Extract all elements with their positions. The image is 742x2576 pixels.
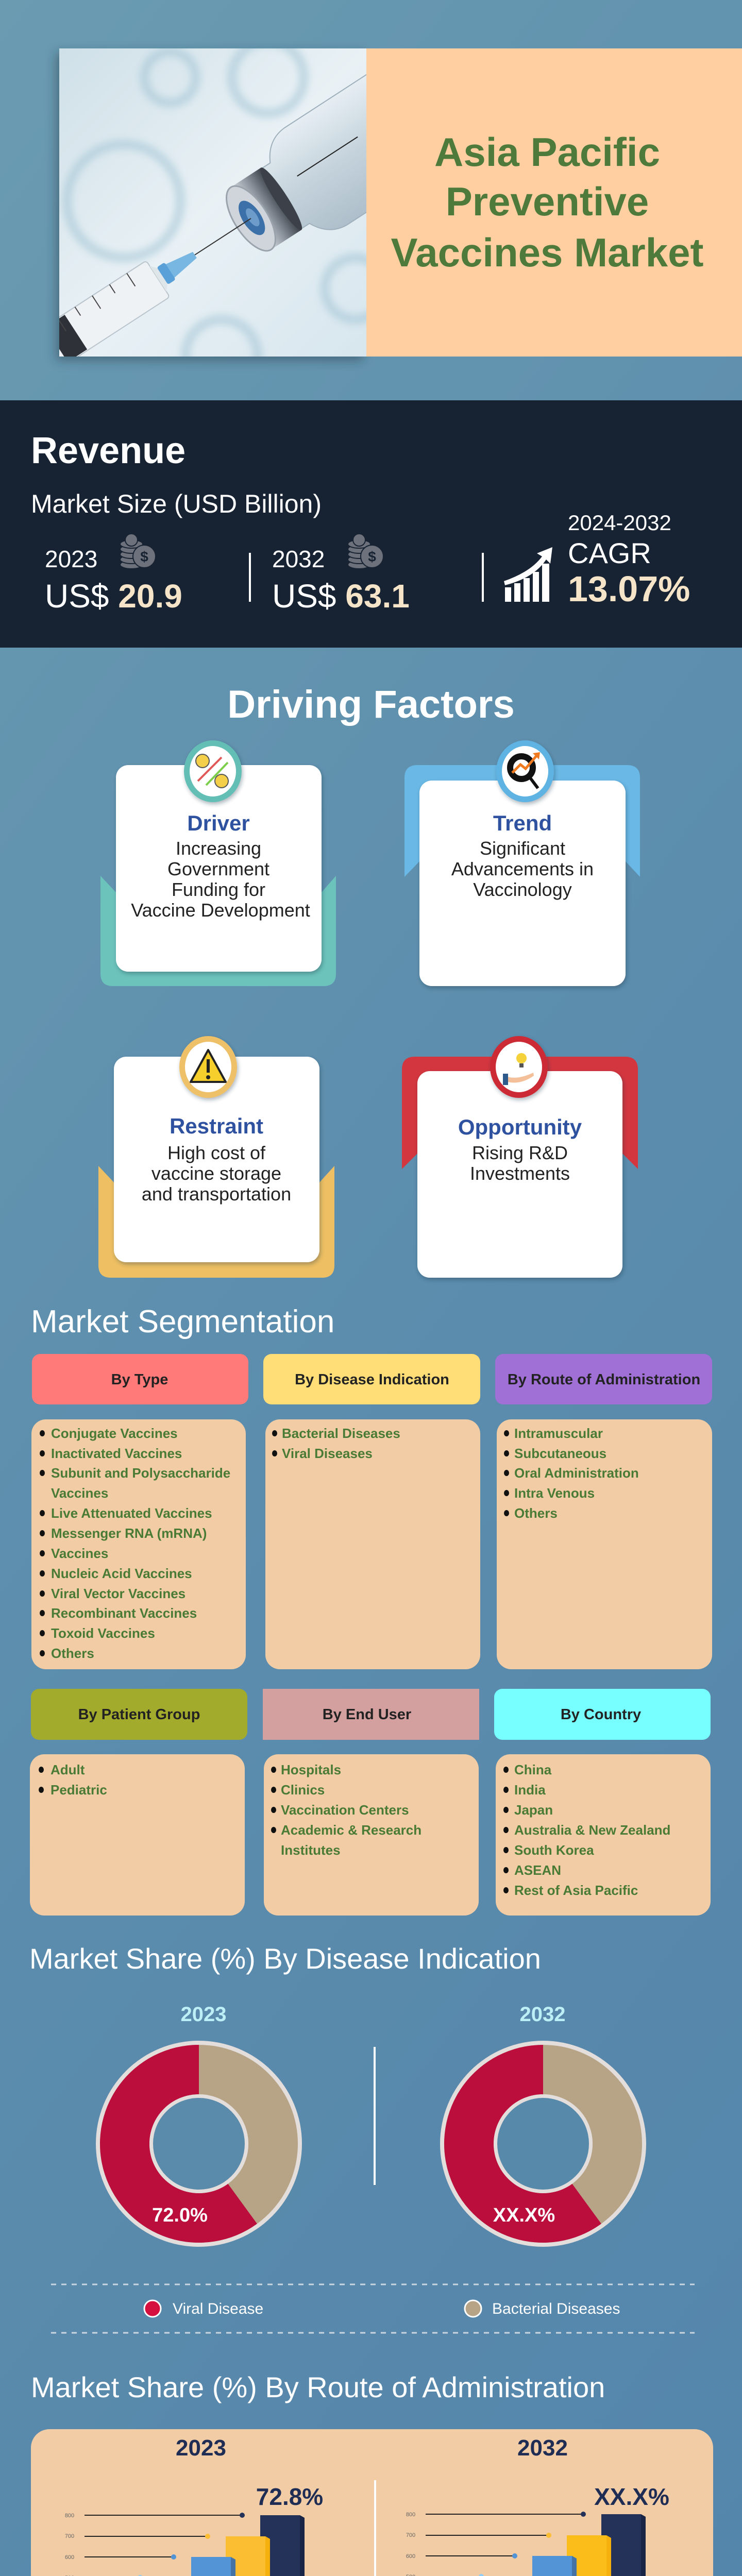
bar chart 2023 (65, 2435, 323, 2576)
hero: photo (52, 47, 367, 366)
panel: opportunity (402, 1036, 638, 1278)
stat: 2032: 2032 (272, 546, 325, 572)
hero: title panel: Asia Pacific (434, 129, 660, 175)
segmentation: by type: Vaccines (51, 1546, 108, 1561)
segmentation: by type: Inactivated Vaccines (51, 1446, 182, 1461)
panel: restraint: High cost of (167, 1142, 266, 1163)
segmentation: by type: By Type (111, 1371, 168, 1388)
panel: trend: Advancements in (451, 858, 594, 879)
panel: restraint (98, 1036, 334, 1278)
bar chart 2023: 72.8% (256, 2483, 323, 2510)
stat: CAGR: CAGR (568, 537, 651, 569)
segmentation: by country: By Country (561, 1706, 641, 1723)
panel: trend (404, 740, 640, 986)
donut chart 2023: 72.0% (152, 2205, 208, 2226)
segmentation: by end user: Institutes (281, 1842, 341, 1858)
segmentation: by type (31, 1354, 248, 1669)
segmentation: by disease indication: Viral Diseases (282, 1446, 373, 1461)
stat: CAGR: 2024-2032 (568, 511, 671, 535)
bar chart 2023: 700 (65, 2533, 74, 2539)
panel: route bar charts (31, 2429, 713, 2576)
hero: title panel: Preventive (446, 179, 649, 224)
segmentation: by type: Others (51, 1646, 94, 1661)
donut chart 2032: XX.X% (493, 2205, 555, 2226)
bar chart 2032: 700 (406, 2532, 415, 2538)
panel: driver: Increasing (176, 838, 261, 859)
segmentation: by country: Japan (514, 1802, 553, 1818)
legend: disease indication (51, 2284, 695, 2333)
icon: driver (184, 740, 242, 802)
panel: opportunity: Rising R&D (472, 1142, 568, 1163)
heading: market share by route of administration: Market Share (%) By Route of Administration (31, 2371, 605, 2403)
segmentation: by route of administration: By Route of Administration (508, 1371, 700, 1388)
segmentation: by route of administration: Oral Administration (514, 1465, 639, 1481)
segmentation: by type: Vaccines (51, 1485, 108, 1501)
panel: driver (100, 740, 336, 986)
segmentation: by type: Recombinant Vaccines (51, 1605, 197, 1621)
revenue band (0, 400, 742, 648)
segmentation: by country: China (514, 1762, 552, 1777)
bar chart 2032: 600 (406, 2553, 415, 2560)
segmentation: by route of administration: Subcutaneous (514, 1446, 606, 1461)
segmentation: by type: Viral Vector Vaccines (51, 1586, 185, 1601)
segmentation: by country (494, 1689, 711, 1916)
segmentation: by country: ASEAN (514, 1862, 561, 1878)
icon: opportunity (490, 1036, 548, 1098)
segmentation: by end user: By End User (323, 1706, 411, 1723)
segmentation: by end user: Vaccination Centers (281, 1802, 409, 1818)
subheading: market size: Market Size (USD Billion) (31, 489, 322, 518)
stat: 2023: 2023 (45, 546, 97, 572)
segmentation: by route of administration: Others (514, 1505, 558, 1521)
panel: driver: Vaccine Development (131, 900, 310, 921)
segmentation: by patient group: Pediatric (50, 1782, 107, 1798)
segmentation: by patient group: By Patient Group (78, 1706, 200, 1723)
segmentation: by type: Subunit and Polysaccharide (51, 1465, 230, 1481)
panel: opportunity: Investments (470, 1163, 570, 1184)
panel: trend: Vaccinology (473, 879, 572, 900)
segmentation: by disease indication: By Disease Indication (295, 1371, 449, 1388)
panel: restraint: Restraint (170, 1114, 263, 1138)
icon: growth chart (504, 547, 552, 602)
heading: revenue: Revenue (31, 430, 185, 471)
bar chart 2023: 2023 (176, 2435, 226, 2461)
segmentation: by country: Rest of Asia Pacific (514, 1883, 638, 1898)
stat: CAGR (568, 511, 690, 609)
panel: driver: Government (167, 858, 269, 879)
segmentation: by country: India (514, 1782, 546, 1798)
hero: title panel: Vaccines Market (391, 230, 704, 275)
donut chart 2032 (440, 2003, 646, 2247)
segmentation: by country: Australia & New Zealand (514, 1822, 670, 1838)
segmentation: by route of administration: Intramuscular (514, 1426, 603, 1441)
heading: market segmentation: Market Segmentation (31, 1304, 334, 1340)
icon: trend (496, 740, 554, 802)
panel: restraint: vaccine storage (151, 1163, 281, 1184)
segmentation: by country: South Korea (514, 1842, 594, 1858)
segmentation: by type: Live Attenuated Vaccines (51, 1505, 212, 1521)
icon: coins 2023: $ (140, 549, 148, 565)
segmentation: by end user: Academic & Research (281, 1822, 421, 1838)
segmentation: by type: Conjugate Vaccines (51, 1426, 178, 1441)
bar chart 2023: 800 (65, 2513, 74, 2519)
donut chart 2023: 2023 (181, 2003, 226, 2026)
stat: 2023: US$ 20.9 (45, 578, 182, 615)
segmentation: by route of administration (495, 1354, 712, 1669)
segmentation: by end user: Clinics (281, 1782, 325, 1798)
segmentation: by patient group (30, 1689, 247, 1916)
segmentation: by disease indication (263, 1354, 480, 1669)
bar chart 2023: 600 (65, 2554, 74, 2561)
panel: restraint: and transportation (142, 1183, 291, 1205)
segmentation: by type: Toxoid Vaccines (51, 1625, 155, 1641)
panel: trend: Significant (480, 838, 565, 859)
stat: 2032: US$ 63.1 (272, 578, 410, 615)
bar chart 2032: 800 (406, 2512, 415, 2518)
panel: driver: Funding for (172, 879, 265, 900)
panel: opportunity: Opportunity (458, 1115, 582, 1139)
bar chart 2032 (406, 2435, 669, 2576)
icon: warning (179, 1036, 237, 1098)
icon: coins 2032: $ (368, 549, 376, 565)
panel: trend: Trend (493, 811, 552, 835)
stat: CAGR: 13.07% (568, 569, 690, 609)
segmentation: by type: Nucleic Acid Vaccines (51, 1566, 192, 1581)
bar chart 2032: XX.X% (594, 2483, 669, 2510)
icon: coins 2023 (120, 534, 156, 569)
panel: driver: Driver (187, 811, 250, 835)
stat: 2023 (45, 546, 182, 615)
segmentation: by end user (263, 1689, 479, 1916)
segmentation: by type: Messenger RNA (mRNA) (51, 1526, 207, 1541)
segmentation: by disease indication: Bacterial Diseases (282, 1426, 400, 1441)
legend: disease indication: Viral Disease (173, 2300, 263, 2317)
donut chart 2023 (96, 2003, 302, 2247)
icon: coins 2032 (348, 534, 383, 569)
segmentation: by patient group: Adult (50, 1762, 85, 1777)
segmentation: by route of administration: Intra Venous (514, 1485, 595, 1501)
bar chart 2032: 2032 (517, 2435, 568, 2461)
legend: disease indication: Bacterial Diseases (492, 2300, 620, 2317)
stat: 2032 (272, 546, 410, 615)
segmentation: by end user: Hospitals (281, 1762, 341, 1777)
donut chart 2032: 2032 (520, 2003, 565, 2026)
hero: title panel (366, 48, 742, 357)
heading: market share by disease indication: Market Share (%) By Disease Indication (29, 1942, 541, 1975)
heading: driving factors: Driving Factors (227, 683, 515, 726)
